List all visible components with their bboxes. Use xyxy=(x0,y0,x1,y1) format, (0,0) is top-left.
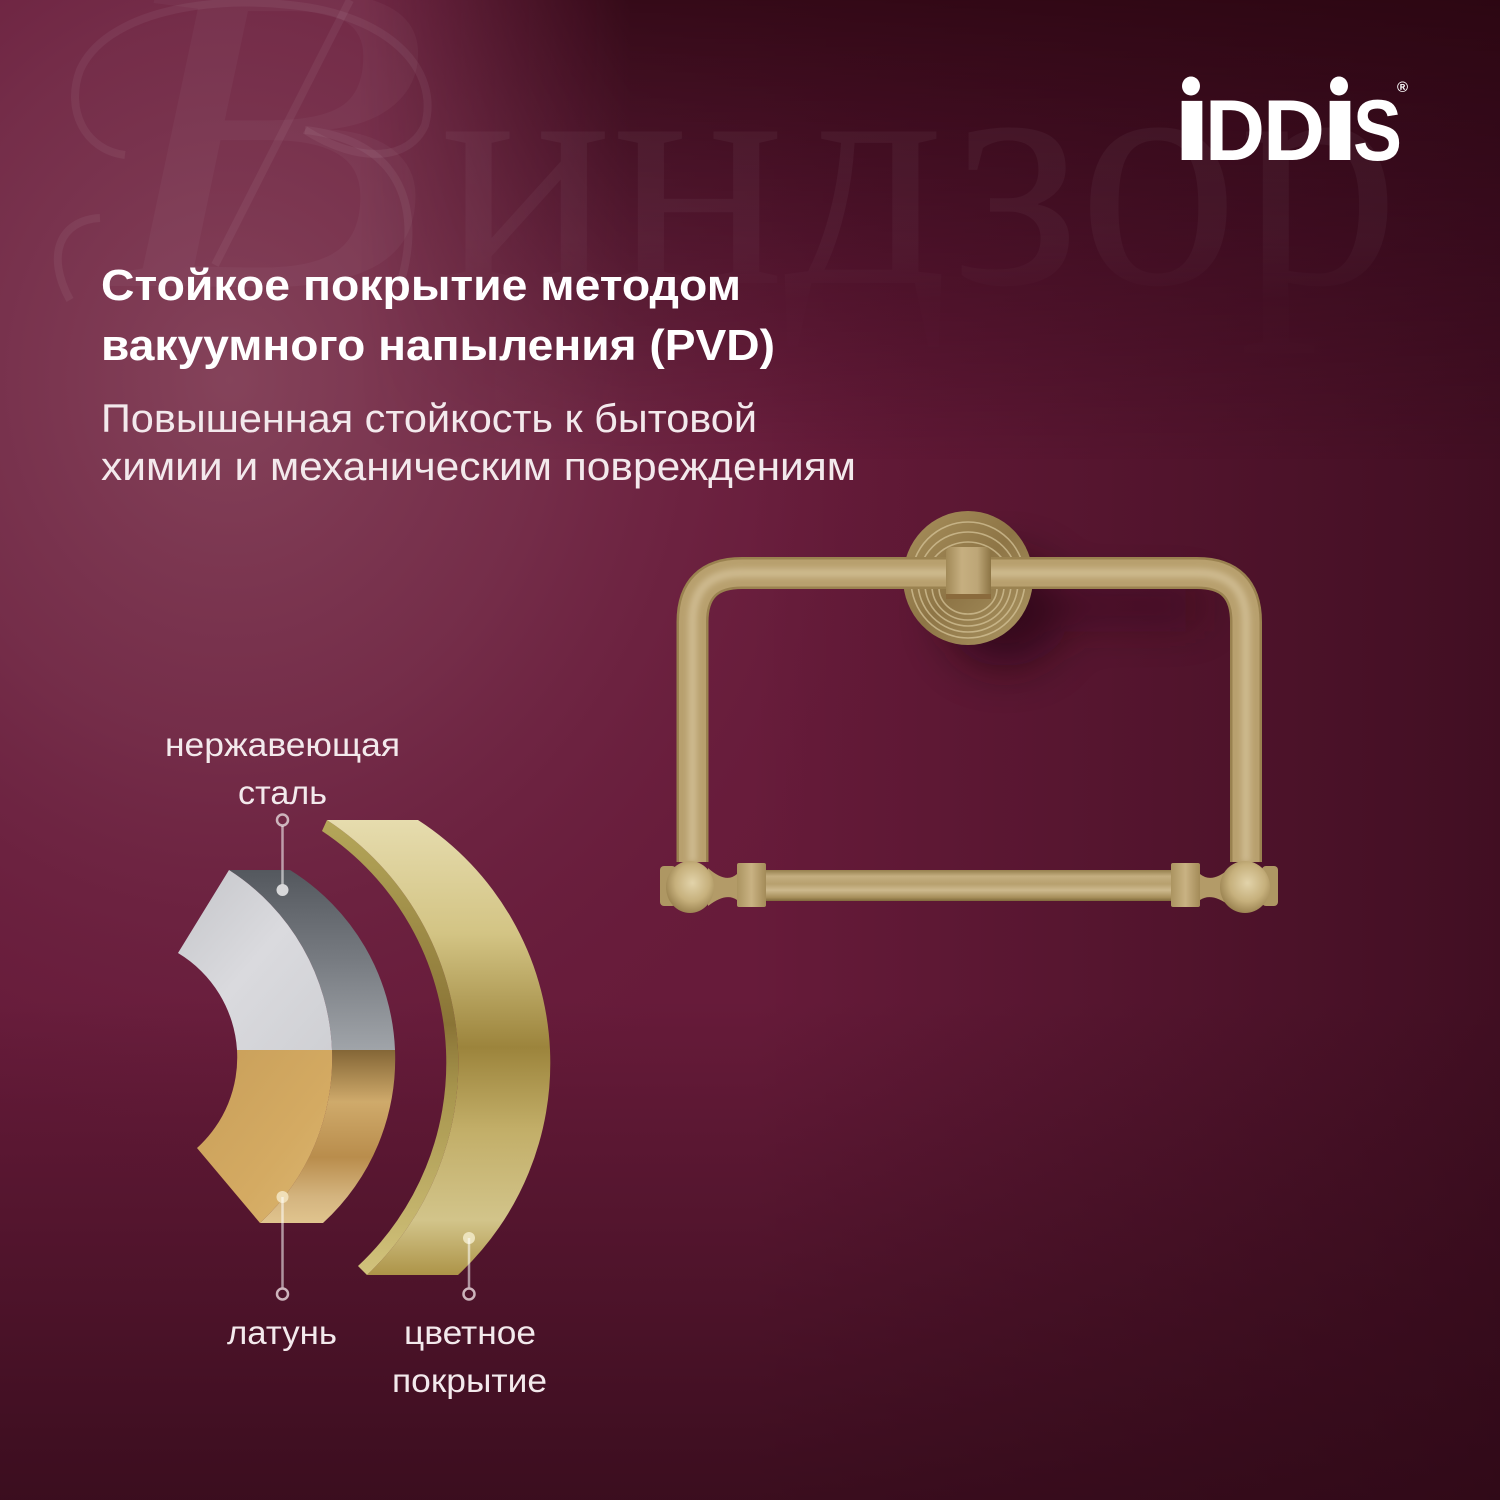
right end fitting xyxy=(1171,861,1278,913)
coating front face xyxy=(327,820,550,1275)
subheading text: химии и механическим повреждениям xyxy=(101,445,856,489)
logo: IDDIS: I xyxy=(1320,83,1360,179)
callout: colour coating: цветное xyxy=(404,1314,536,1351)
callout: colour coating xyxy=(392,1232,547,1399)
heading: Стойкое покрытие методом xyxy=(101,261,741,310)
subheading text: Повышенная стойкость к бытовой xyxy=(101,397,757,441)
logo: IDDIS xyxy=(1172,76,1408,179)
wall plate xyxy=(903,511,1033,645)
logo: IDDIS: D xyxy=(1263,83,1325,179)
coating side face xyxy=(322,820,458,1275)
callout: brass xyxy=(227,1191,337,1351)
watermark: collection name xyxy=(58,0,1400,384)
logo: IDDIS: S xyxy=(1353,83,1402,179)
heading xyxy=(101,261,775,370)
logo: IDDIS: I xyxy=(1172,83,1212,179)
left end fitting xyxy=(660,861,766,913)
bent tube xyxy=(692,573,1246,862)
logo: IDDIS: ® xyxy=(1397,79,1408,96)
callout: stainless steel: нержавеющая xyxy=(165,726,400,763)
ring wall shadow xyxy=(945,557,1200,667)
logo: IDDIS: D xyxy=(1205,83,1265,179)
lower bar xyxy=(764,870,1174,901)
steel back face xyxy=(229,870,395,1050)
material cross-section diagram xyxy=(178,820,550,1275)
callout: brass: латунь xyxy=(227,1314,337,1351)
callout: stainless steel xyxy=(165,726,400,896)
clamp xyxy=(946,547,991,599)
steel front face xyxy=(178,870,332,1050)
heading: вакуумного напыления (PVD) xyxy=(101,321,775,370)
watermark: collection name: индзор xyxy=(440,0,1400,355)
callout: stainless steel: сталь xyxy=(238,774,327,811)
brass front face xyxy=(197,1050,332,1223)
callout: colour coating: покрытие xyxy=(392,1362,547,1399)
brass back face xyxy=(260,1050,395,1223)
subheading text xyxy=(101,397,856,489)
towel ring product xyxy=(660,511,1278,913)
